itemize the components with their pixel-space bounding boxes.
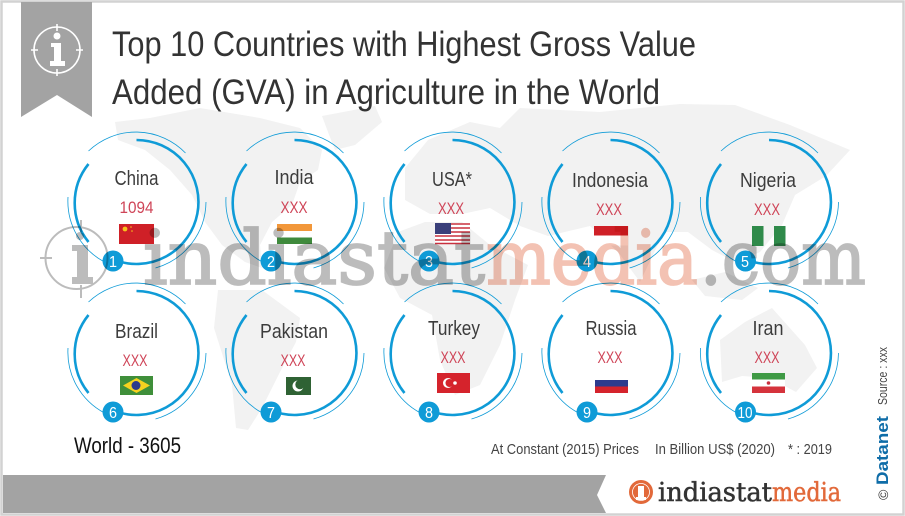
country: Turkey: 8 <box>425 405 433 422</box>
country: Iran: 10 <box>738 405 753 422</box>
country: China: 1094 <box>120 198 154 217</box>
footer logo: media <box>772 478 841 508</box>
icon: ribbon with info symbol <box>21 2 92 117</box>
title <box>112 25 696 112</box>
watermark <box>40 214 866 302</box>
flag: Nigeria <box>752 226 786 246</box>
watermark: indiastat <box>143 214 485 302</box>
flag: USA <box>435 223 470 244</box>
country: China <box>68 132 206 272</box>
title: Top 10 Countries with Highest Gross Value <box>112 25 696 64</box>
country: Russia: Russia <box>586 318 637 340</box>
flag: China <box>119 224 154 244</box>
unit notes: In Billion US$ (2020) <box>655 441 775 458</box>
country: USA: 3 <box>425 254 433 271</box>
country: Russia: XXX <box>598 348 622 367</box>
unit notes: * : 2019 <box>788 441 832 458</box>
country: Turkey: Turkey <box>428 318 480 340</box>
flag: Russia <box>595 373 628 393</box>
country: Turkey: XXX <box>440 348 466 367</box>
flag: Pakistan <box>286 377 311 395</box>
country: China: China <box>114 168 159 190</box>
country: Turkey <box>384 283 522 422</box>
flag: Turkey <box>437 373 470 393</box>
country: China: 1 <box>109 254 117 271</box>
country: Brazil: XXX <box>122 351 148 370</box>
flag: India <box>277 224 312 244</box>
country: Iran: XXX <box>754 348 780 367</box>
country: India: 2 <box>267 254 275 271</box>
country: Pakistan: Pakistan <box>260 321 328 343</box>
footer logo <box>629 478 841 508</box>
country: Nigeria: Nigeria <box>740 170 797 192</box>
country: Russia <box>542 283 680 422</box>
footer logo: indiastat <box>658 478 773 508</box>
source credit <box>873 347 892 500</box>
country: Indonesia <box>542 132 680 272</box>
country: Pakistan: XXX <box>280 351 306 370</box>
flag: Brazil <box>120 376 153 395</box>
flag: Indonesia <box>594 226 628 246</box>
flag: Iran <box>752 373 785 393</box>
country: Nigeria <box>700 132 838 272</box>
country: Indonesia: Indonesia <box>572 170 649 192</box>
unit notes: At Constant (2015) Prices <box>491 441 639 458</box>
country: Russia: 9 <box>583 405 591 422</box>
source credit: © <box>875 489 891 500</box>
watermark: .com <box>700 214 866 302</box>
country: India <box>226 132 364 272</box>
country: Iran: Iran <box>752 318 784 340</box>
country: Nigeria: 5 <box>741 254 749 271</box>
source credit: Datanet <box>873 416 892 485</box>
world map background <box>115 104 850 430</box>
country: Iran <box>700 283 838 422</box>
country: USA: XXX <box>438 199 464 218</box>
country: USA: USA* <box>432 169 472 191</box>
country: USA <box>384 132 522 272</box>
source credit: Source : xxx <box>875 347 890 405</box>
country: India: India <box>274 167 314 189</box>
country: Pakistan: 7 <box>267 405 275 422</box>
country: Nigeria: XXX <box>754 200 780 219</box>
watermark: media <box>486 214 698 302</box>
country: Indonesia: XXX <box>596 200 622 219</box>
country: India: XXX <box>280 198 308 217</box>
country: Brazil <box>68 283 206 422</box>
footer band <box>3 475 606 513</box>
unit notes <box>491 441 832 458</box>
country: Pakistan <box>226 283 364 422</box>
country: Indonesia: 4 <box>583 254 591 271</box>
country: Brazil: Brazil <box>115 321 158 343</box>
title: Added (GVA) in Agriculture in the World <box>112 73 660 112</box>
country: Brazil: 6 <box>109 405 117 422</box>
world total: World - 3605 <box>74 433 181 458</box>
